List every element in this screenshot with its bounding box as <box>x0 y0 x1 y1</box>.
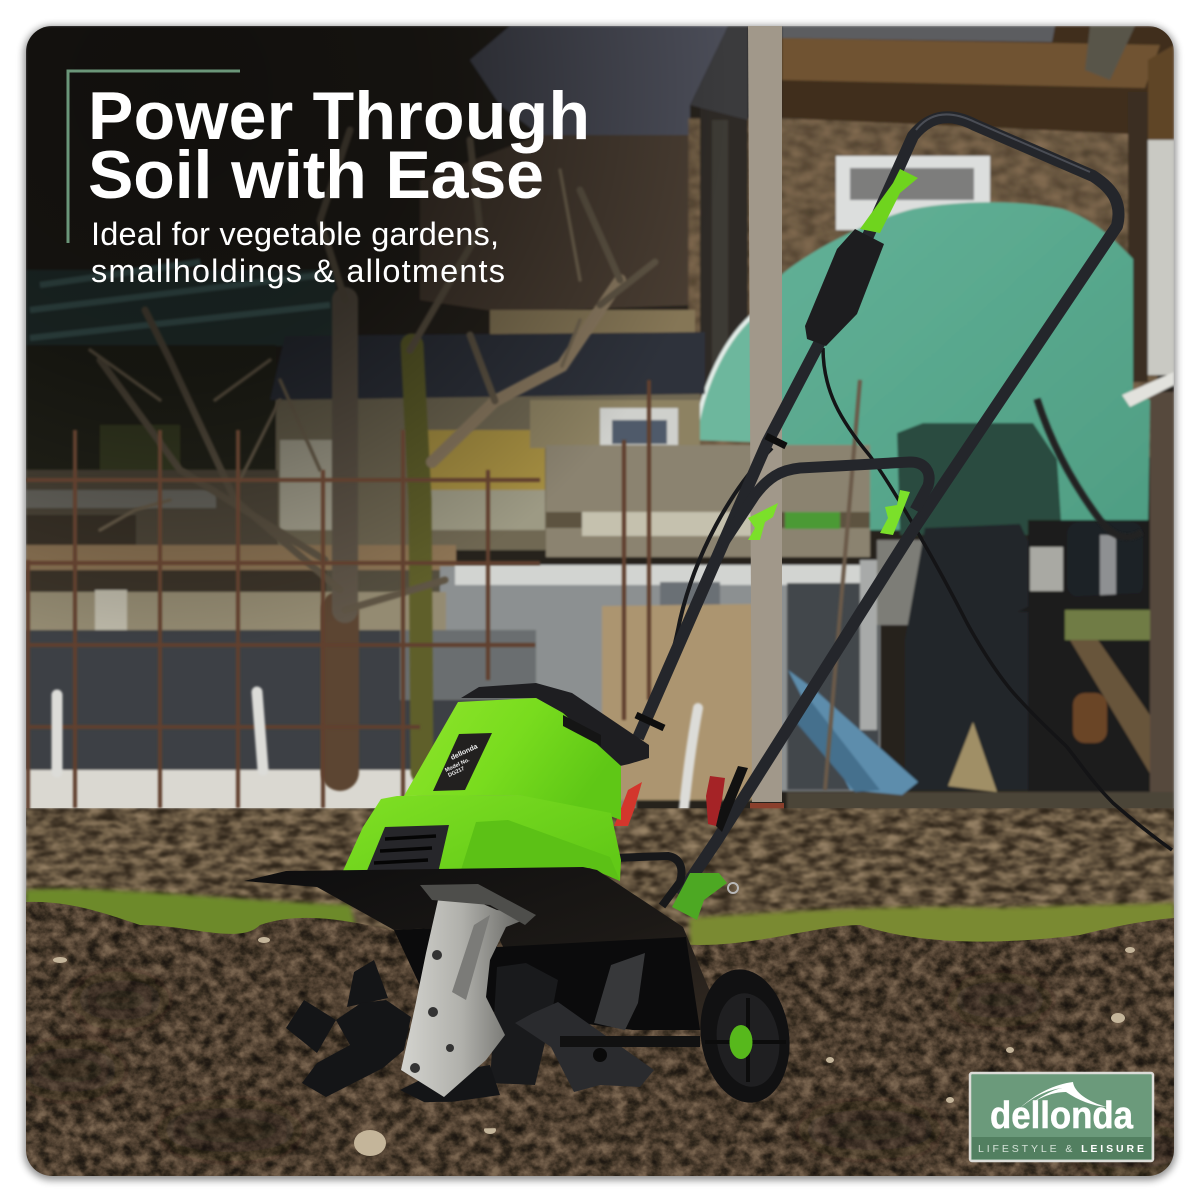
model label <box>433 733 492 791</box>
window <box>836 156 990 230</box>
green clamps <box>748 503 778 540</box>
tines <box>286 953 700 1105</box>
logo tagline: LIFESTYLE & LEISURE <box>978 1143 1147 1155</box>
tree and post <box>90 130 655 772</box>
black lid <box>461 683 649 766</box>
rusty rebar fence <box>26 380 860 810</box>
brick wall <box>688 118 1158 458</box>
far soil <box>26 808 1174 953</box>
upper body <box>404 698 621 820</box>
wooden post <box>748 26 782 802</box>
white wall strip <box>26 770 416 810</box>
soil shadows <box>20 980 1190 1168</box>
logo wave <box>1020 1082 1107 1108</box>
striped box <box>877 540 929 625</box>
loose cable on handle <box>655 448 772 705</box>
pallets <box>546 445 870 557</box>
heading frame <box>68 71 240 243</box>
tube collar <box>714 766 748 832</box>
polytunnel large <box>780 202 1150 530</box>
clamp rings <box>636 436 786 728</box>
rear axle frame <box>612 856 682 906</box>
black bin <box>905 524 1032 790</box>
wooden canopy <box>782 26 1174 136</box>
triangle board <box>948 722 997 792</box>
house wall below shed <box>276 394 700 550</box>
top beige band <box>490 310 695 334</box>
right building window <box>1148 140 1174 375</box>
wall blocks under tree <box>26 345 276 475</box>
product: garden tiller <box>244 114 1172 1130</box>
top left dark scrim <box>26 26 686 620</box>
light wall left <box>26 592 446 632</box>
concrete building <box>440 566 880 791</box>
canopy lines teal <box>26 270 336 346</box>
vent <box>366 825 449 873</box>
green rear bracket <box>672 873 727 920</box>
ground strip <box>787 792 1174 828</box>
pebbles <box>53 937 1135 1156</box>
heading group <box>68 71 590 289</box>
near soil <box>20 902 1190 1176</box>
power cable <box>823 348 1172 850</box>
switch box <box>805 229 884 346</box>
logo badge: dellonda <box>970 1073 1153 1161</box>
garden stake <box>958 630 966 823</box>
model label: dellonda <box>450 743 479 762</box>
polytunnel small <box>698 320 750 444</box>
model label: DG217 <box>447 766 466 779</box>
background: blurred garden <box>26 26 1174 828</box>
title: Soil with Ease <box>88 137 544 213</box>
grass band <box>26 889 360 945</box>
right timber wall <box>1150 392 1174 802</box>
white stakes <box>57 692 698 825</box>
fence mesh <box>26 630 536 772</box>
plywood board <box>602 604 755 800</box>
right dark area <box>1028 520 1153 792</box>
background hose <box>1032 396 1118 540</box>
dark shed roof <box>270 332 705 400</box>
upper handle frame <box>638 117 1119 895</box>
logo wordmark: dellonda <box>990 1095 1134 1137</box>
model label: Model No. <box>444 757 471 774</box>
foreground soil mound <box>360 1086 740 1130</box>
handle highlight <box>916 114 1090 172</box>
red knobs <box>614 782 642 826</box>
brown roof <box>420 135 695 312</box>
left mid band <box>26 470 278 550</box>
subtitle: Ideal for vegetable gardens, <box>91 216 499 252</box>
water butt <box>897 423 1062 535</box>
horizontal board <box>26 545 456 570</box>
title: Power Through <box>88 78 590 154</box>
silver gearbox <box>401 884 536 1097</box>
wheel <box>692 964 798 1108</box>
lower body <box>342 795 621 881</box>
lower bail handle <box>722 462 929 545</box>
green grip <box>860 169 918 233</box>
hood <box>244 867 722 1030</box>
blue pipes <box>788 670 918 795</box>
subtitle: smallholdings & allotments <box>91 253 505 289</box>
sky and slate roof <box>470 26 728 135</box>
hood interior <box>394 925 700 1030</box>
